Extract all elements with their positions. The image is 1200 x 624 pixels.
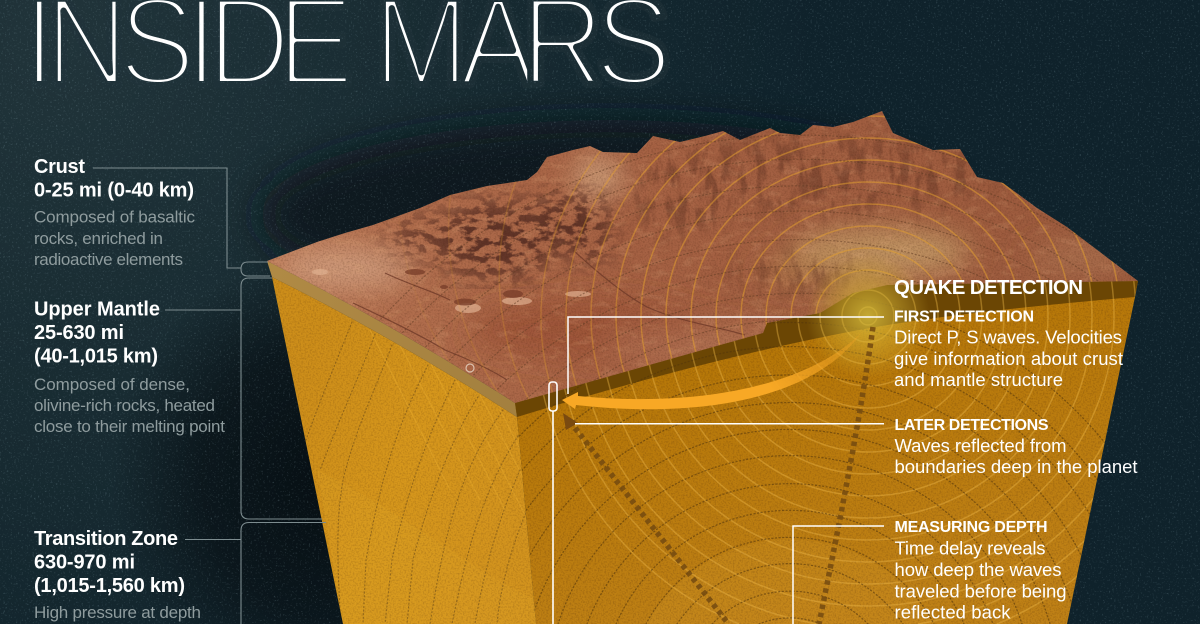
callout: first detection: Direct P, S waves. Velocities (894, 326, 1122, 348)
label: crust: Composed of basaltic (34, 208, 196, 226)
reflected wave arrowhead (563, 413, 578, 430)
quake epicentre glow (806, 254, 930, 378)
front face: mantle (515, 281, 1138, 624)
callout: measuring depth: traveled before being (894, 580, 1066, 602)
callout: later detections (575, 417, 1138, 477)
reflected wave path: dashed (575, 428, 727, 622)
surface: dotted rings (378, 134, 1098, 400)
label: crust: rocks, enriched in (34, 229, 163, 248)
label: transition zone: High pressure at depth (34, 603, 201, 622)
callout: later detections: Waves reflected from (894, 435, 1066, 456)
front face: dotted boundary rings (519, 297, 1105, 624)
label: upper mantle (34, 298, 225, 436)
callout: first detection: and mantle structure (894, 369, 1063, 390)
callout: first detection (568, 308, 1123, 394)
label: upper mantle: Composed of dense, (34, 375, 190, 394)
label: crust (34, 156, 196, 269)
label: transition zone: 630-970 mi (34, 552, 135, 574)
seismometer marker and leader (549, 382, 557, 624)
layer brackets and leaders (93, 168, 326, 624)
surface: solid wave rings (439, 115, 1118, 400)
planet cross-section block (267, 111, 1138, 624)
callout: measuring depth: Time delay reveals (894, 538, 1046, 558)
label: upper mantle: (40-1,015 km) (34, 346, 158, 368)
quake detection heading: QUAKE DETECTION (894, 276, 1083, 299)
front face: solid wave rings (543, 281, 1136, 624)
label: upper mantle: Upper Mantle (34, 298, 160, 320)
label: crust: radioactive elements (34, 250, 183, 269)
callout: measuring depth: reflected back (894, 602, 1011, 622)
callout: measuring depth: MEASURING DEPTH (894, 519, 1048, 536)
label: upper mantle: close to their melting point (34, 417, 225, 436)
callout: later detections: boundaries deep in the planet (894, 456, 1138, 477)
label: upper mantle: olivine-rich rocks, heated (34, 396, 215, 415)
surface craters and fault lines (312, 250, 745, 380)
direct wave arrow (562, 332, 862, 409)
label: upper mantle: 25-630 mi (34, 322, 124, 344)
callout: first detection: give information about crust (894, 348, 1123, 369)
label: transition zone (34, 528, 201, 622)
surface terrain (267, 111, 1138, 403)
left face: crust strip (267, 261, 517, 417)
callout: first detection: FIRST DETECTION (894, 308, 1034, 326)
vertical wave path: dashed (819, 327, 873, 624)
front face: dark crust band (515, 281, 1138, 417)
callout: measuring depth (793, 519, 1066, 624)
label: crust: 0-25 mi (0-40 km) (34, 180, 194, 202)
callout: later detections: LATER DETECTIONS (894, 417, 1049, 434)
label: transition zone: (1,015-1,560 km) (34, 575, 185, 597)
left face: mantle (272, 277, 536, 624)
label: transition zone: Transition Zone (34, 528, 178, 550)
callout: measuring depth: how deep the waves (894, 559, 1062, 580)
label: crust: Crust (34, 156, 85, 178)
